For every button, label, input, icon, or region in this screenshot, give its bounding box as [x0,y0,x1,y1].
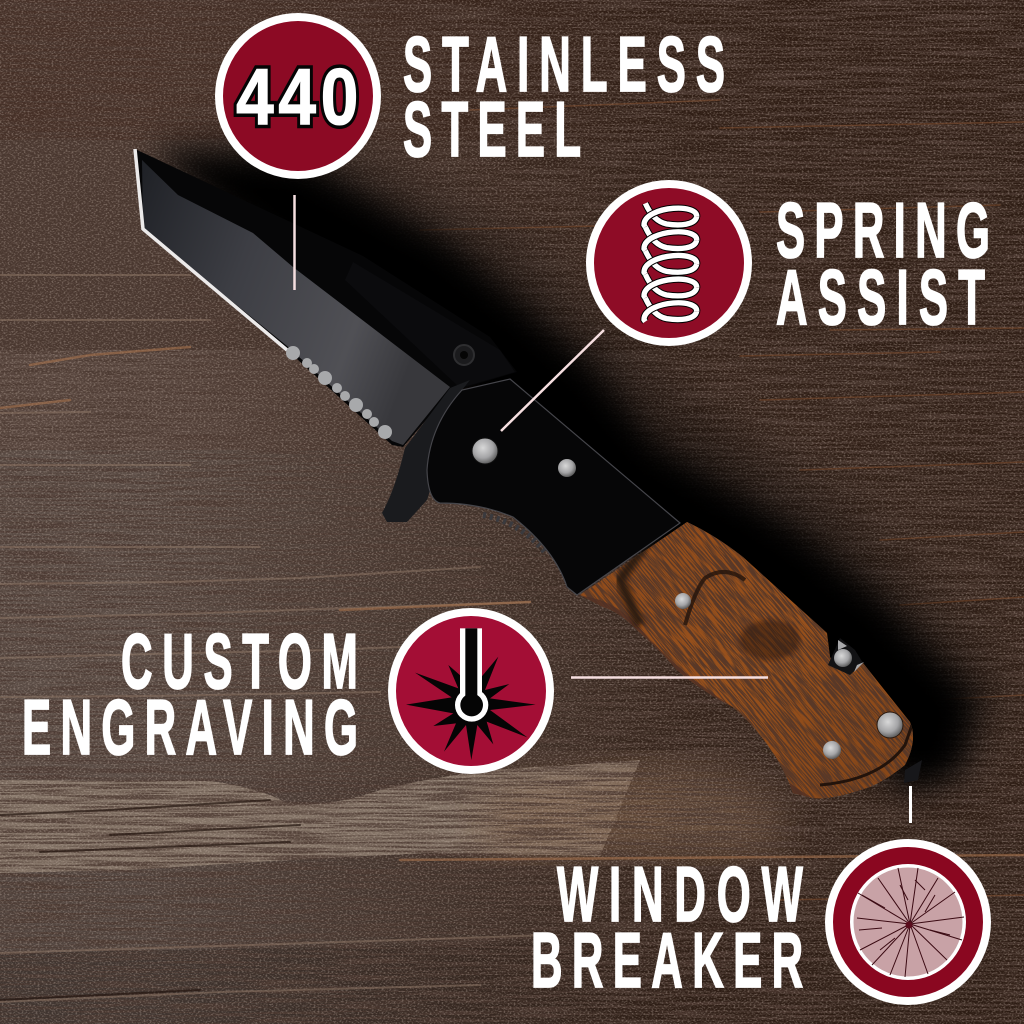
icon: custom engraving badge [392,612,550,770]
black handle scale [427,379,680,595]
wood screw right [877,712,903,738]
knife shadow [170,140,1000,790]
heading: spring assist [776,188,990,341]
handle screw large [472,438,498,464]
heading: custom engraving: CUSTOM [121,619,358,705]
heading: spring assist: SPRING [776,188,990,274]
heading: stainless steel: STEEL [403,87,581,173]
handle screw small [558,459,576,477]
wood handle [580,522,922,798]
knife [133,148,922,798]
leader line: spring assist [501,330,604,431]
heading: spring assist: ASSIST [776,255,985,341]
leader line: window breaker [909,786,912,823]
light plank [0,760,640,873]
leader line: stainless steel [293,195,296,290]
seatbelt cutter [828,638,864,675]
lower handle jimping [483,515,545,552]
icon: 440 steel badge: 440 [236,52,358,141]
icon: window breaker badge [829,843,987,1001]
wood screw top [675,593,691,609]
icon: 440 steel badge [219,17,377,175]
heading: window breaker: WINDOW [557,852,803,938]
heading: custom engraving: ENGRAVING [22,685,358,771]
blade serrations [286,346,392,439]
heading: window breaker: BREAKER [531,918,803,1004]
wood screw lower [823,741,841,759]
leader line: custom engraving [571,676,768,679]
shattered glass cracks [857,868,964,977]
heading: window breaker [531,852,803,1004]
icon: 440 steel badge: 440 [236,52,358,141]
heading: stainless steel [403,22,725,173]
icon: spring assist badge [590,184,748,342]
window breaker tip [904,760,922,783]
heading: custom engraving [22,619,358,771]
heading: stainless steel: STAINLESS [403,22,725,108]
inner dark shadow [150,150,975,790]
knife blade [135,149,517,447]
flipper guard [382,380,470,522]
